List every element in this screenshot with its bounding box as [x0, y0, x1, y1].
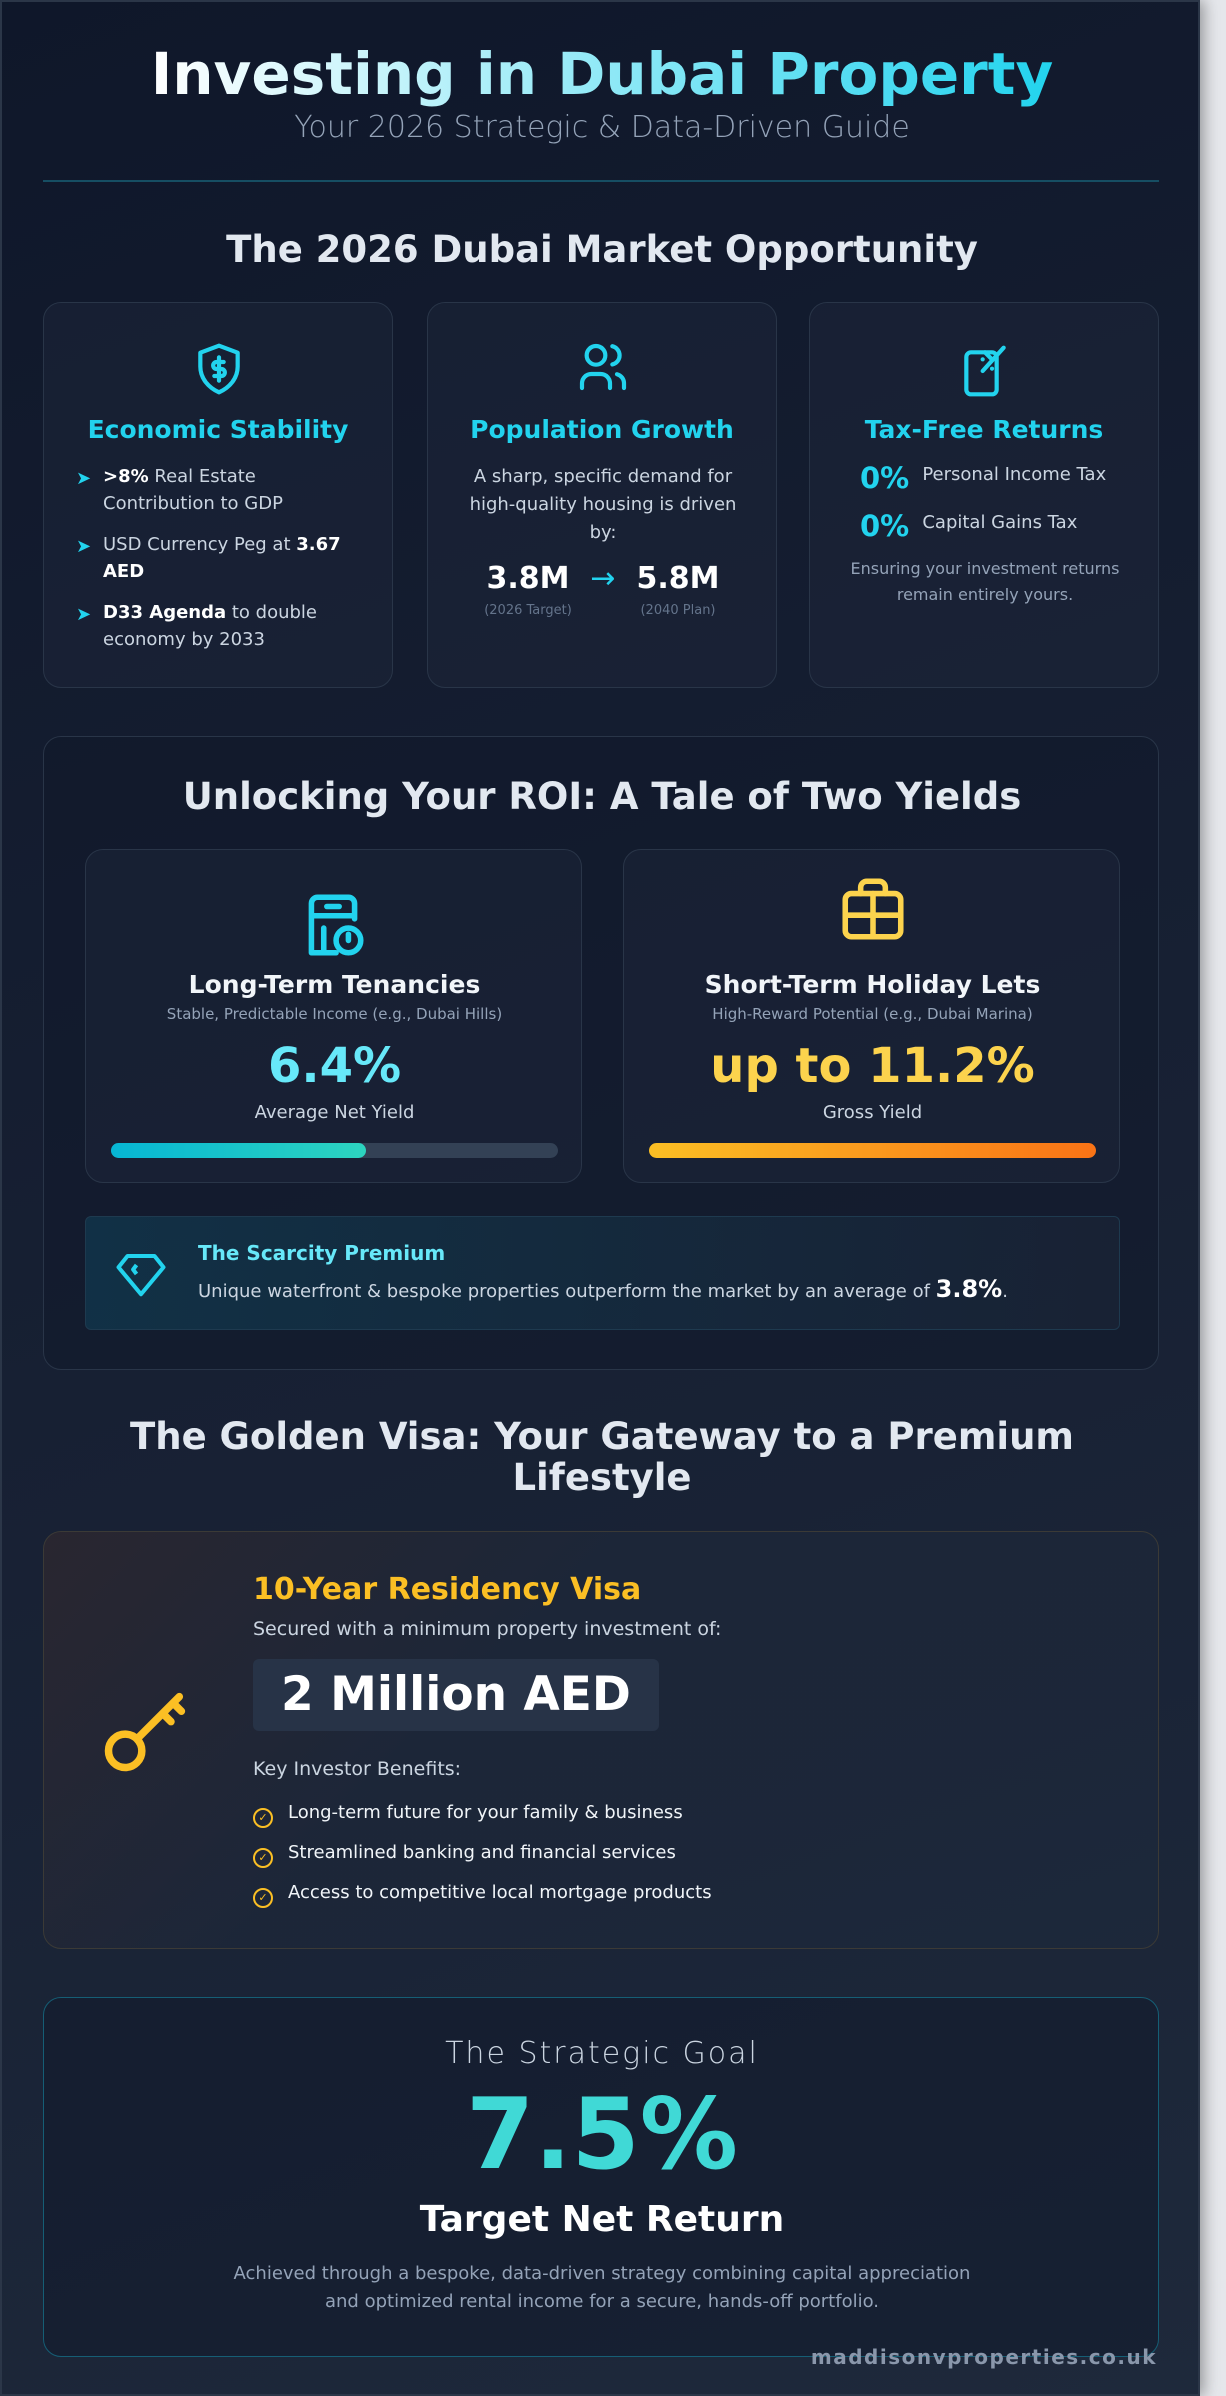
stat: population: [484, 561, 720, 618]
icon: gem: [116, 1254, 166, 1296]
value: 6.4%: [268, 1038, 401, 1094]
benefits list: [253, 1802, 712, 1908]
tax rows: 0% Personal Income Tax: [860, 461, 1106, 495]
sub-card: long term: Average Net Yield: [255, 1102, 414, 1123]
benefits list: ✓: [258, 1811, 268, 1824]
big stat: 7.5%: [466, 2078, 738, 2192]
bullets: USD Currency Peg at 3.67 AED: [103, 534, 341, 582]
bullets: >8% Real Estate Contribution to GDP: [103, 466, 283, 514]
icon: key: [104, 1692, 186, 1772]
callout: scarcity premium: The Scarcity Premium: [198, 1241, 445, 1265]
heading: Unlocking Your ROI: A Tale of Two Yields: [183, 775, 1021, 818]
card title: Tax-Free Returns: [865, 415, 1103, 444]
benefits list: Access to competitive local mortgage products: [288, 1882, 712, 1903]
card title: Population Growth: [470, 415, 734, 444]
heading: golden visa: Lifestyle: [512, 1456, 692, 1499]
stat: population: →: [590, 561, 616, 596]
description: A sharp, specific demand for high-quality housing is driven by:: [470, 466, 736, 543]
panel: golden visa: Secured with a minimum property investment of:: [253, 1618, 721, 1640]
bullets: ➤: [76, 604, 91, 625]
sub-card: long term: [85, 849, 582, 1183]
subtitle: Your 2026 Strategic & Data-Driven Guide: [294, 110, 910, 145]
bullets: ➤: [76, 536, 91, 557]
sub-card: short term: High-Reward Potential (e.g., Dubai Marina): [712, 1005, 1033, 1023]
bullets: ➤: [76, 468, 91, 489]
bullets: [76, 466, 341, 650]
icon: shield dollar: [198, 344, 240, 394]
panel: economic stability: [43, 302, 393, 688]
stat: population: 3.8M: [486, 561, 570, 596]
icon: building clock: [308, 894, 364, 956]
panel: strategic goal: The Strategic Goal: [445, 2036, 759, 2071]
footer: website: maddisonvproperties.co.uk: [811, 2345, 1157, 2369]
sub-card: long term: Stable, Predictable Income (e.g., Dubai Hills): [167, 1005, 502, 1023]
icon: suitcase: [842, 878, 904, 940]
panel: strategic goal: [43, 1997, 1159, 2357]
sub-card: short term: [623, 849, 1120, 1183]
description: Achieved through a bespoke, data-driven strategy combining capital appreciation and optimized rental income for a secure, hands-off portfolio.: [234, 2263, 970, 2312]
stat: population: (2040 Plan): [640, 603, 716, 618]
panel: ROI: [43, 736, 1159, 1370]
benefits list: Long-term future for your family & business: [288, 1802, 683, 1823]
bar: [111, 1143, 558, 1158]
bullets: D33 Agenda to double economy by 2033: [103, 602, 317, 650]
value box: 2 Million AED: [281, 1667, 631, 1722]
panel: tax-free returns: [809, 302, 1159, 688]
title: Long-Term Tenancies: [189, 970, 480, 999]
value: up to 11.2%: [710, 1038, 1035, 1094]
tax rows: [860, 461, 1106, 543]
stat: population: (2026 Target): [484, 603, 572, 618]
panel: golden visa: [43, 1531, 1159, 1949]
visa title: 10-Year Residency Visa: [253, 1572, 641, 1607]
sub-card: short term: Gross Yield: [823, 1102, 922, 1123]
card title: Economic Stability: [88, 415, 348, 444]
title: Short-Term Holiday Lets: [705, 970, 1040, 999]
heading: golden visa: The Golden Visa: Your Gateway to a Premium: [130, 1415, 1074, 1458]
benefits list: ✓: [258, 1891, 268, 1904]
benefits list: ✓: [258, 1851, 268, 1864]
callout: scarcity premium: [85, 1216, 1120, 1330]
callout: scarcity premium: Unique waterfront & bespoke properties outperform the market by an average of 3.8%.: [198, 1275, 1008, 1303]
value box: [253, 1659, 659, 1731]
title: Investing in Dubai Property: [151, 40, 1053, 108]
heading: golden visa: [130, 1415, 1074, 1499]
panel: population growth: [427, 302, 777, 688]
heading: market opportunity: The 2026 Dubai Market Opportunity: [226, 228, 978, 271]
panel: strategic goal: Target Net Return: [420, 2199, 784, 2240]
icon: tax tag: [964, 346, 1006, 396]
tax rows: 0% Capital Gains Tax: [860, 509, 1077, 543]
panel: golden visa: Key Investor Benefits:: [253, 1758, 461, 1780]
note: Ensuring your investment returns remain entirely yours.: [851, 559, 1119, 604]
stat: population: 5.8M: [636, 561, 720, 596]
benefits list: Streamlined banking and financial services: [288, 1842, 676, 1863]
bar: [649, 1143, 1096, 1158]
icon: people: [580, 344, 626, 390]
